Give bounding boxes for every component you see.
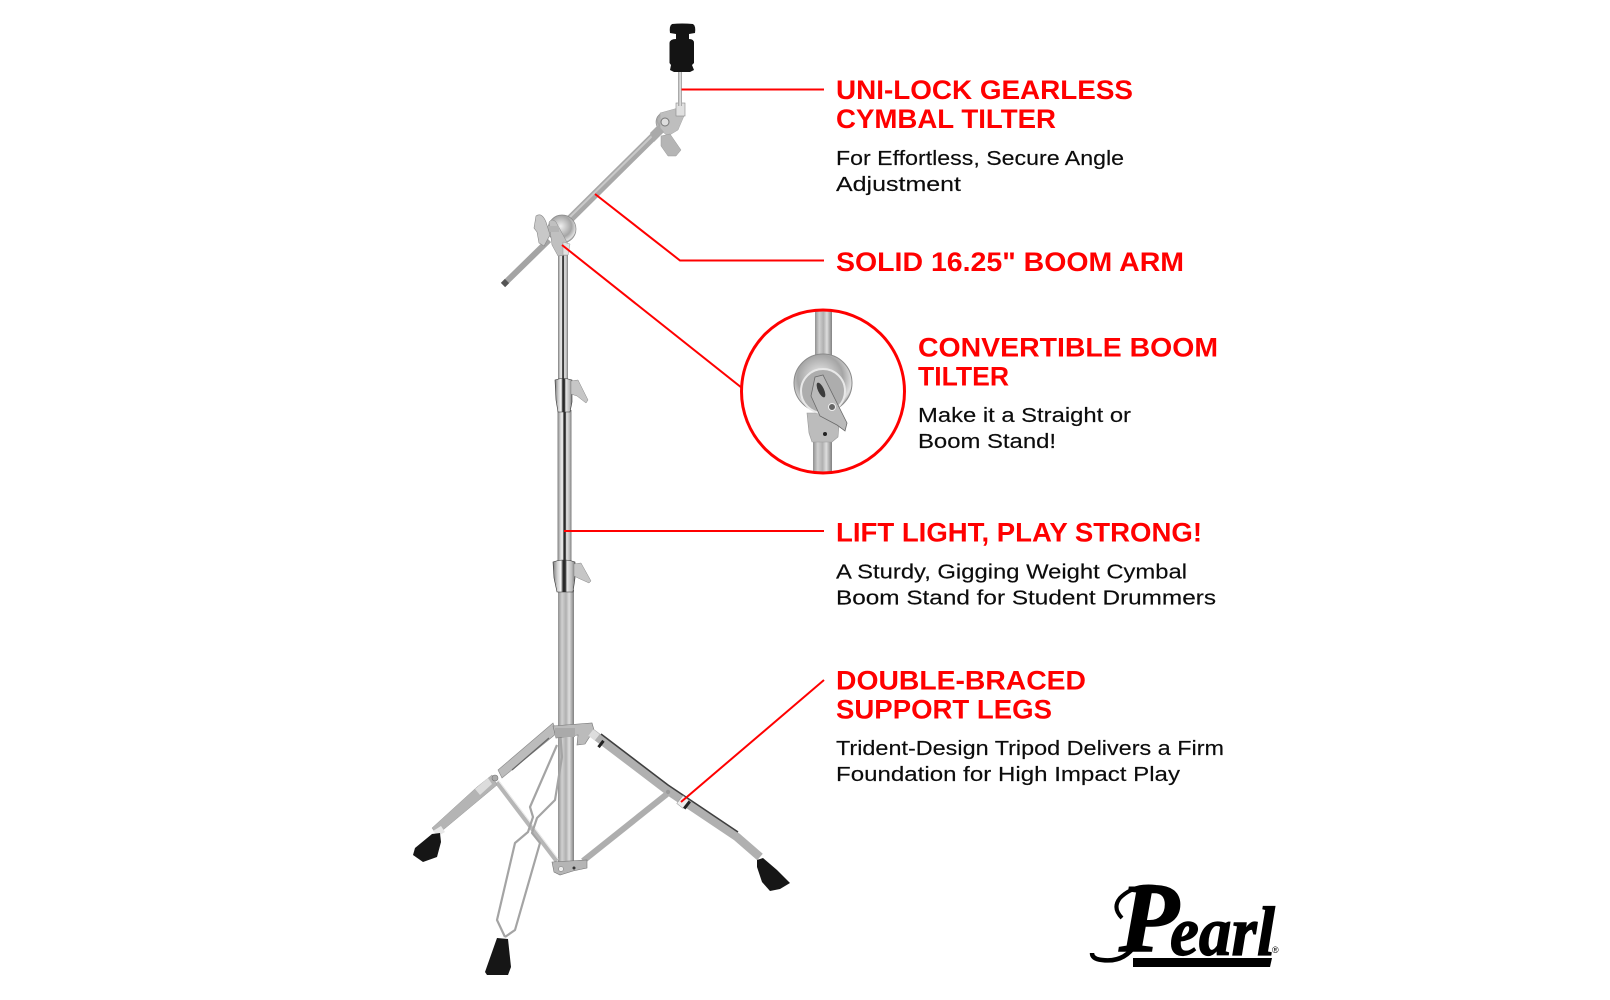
leader line: cymbal tilter: [682, 88, 824, 90]
lower tube: [558, 590, 574, 862]
heading: LIFT LIGHT, PLAY STRONG!: [836, 518, 1202, 548]
left leg: [432, 723, 557, 836]
Pearl logo: earl: [1170, 894, 1276, 971]
description: [836, 560, 1216, 610]
left brace: [497, 782, 557, 861]
boom arm: [503, 135, 655, 285]
heading: [836, 75, 1133, 134]
callout: lift light: [836, 518, 1216, 610]
description: Boom Stand!: [918, 430, 1056, 453]
heading: SUPPORT LEGS: [836, 694, 1052, 724]
front foot: [485, 938, 511, 975]
middle tube: [558, 410, 572, 562]
description: Boom Stand for Student Drummers: [836, 586, 1216, 610]
description: Make it a Straight or: [918, 404, 1131, 427]
leader line: boom tilter: [562, 245, 742, 388]
description: Foundation for High Impact Play: [836, 763, 1181, 786]
leader line: boom arm: [595, 194, 824, 260]
callout: uni-lock tilter: [836, 75, 1133, 196]
callout: boom arm heading: SOLID 16.25" BOOM ARM: [836, 247, 1184, 277]
inset circle detail: [742, 305, 904, 478]
heading: [918, 332, 1218, 392]
description: Trident-Design Tripod Delivers a Firm: [836, 737, 1224, 760]
left foot: [413, 833, 441, 862]
heading: TILTER: [918, 362, 1009, 392]
heading: CYMBAL TILTER: [836, 104, 1056, 134]
right foot: [757, 858, 790, 891]
leader line: stand weight: [564, 530, 824, 532]
callout: support legs: [836, 666, 1224, 786]
description: [918, 404, 1131, 453]
description: [836, 147, 1124, 196]
lower leg bracket: [552, 860, 587, 875]
description: [836, 737, 1224, 786]
upper leg bracket: [553, 723, 600, 745]
heading: [836, 666, 1086, 724]
heading: UNI-LOCK GEARLESS: [836, 75, 1133, 105]
description: Adjustment: [836, 173, 961, 196]
description: For Effortless, Secure Angle: [836, 147, 1124, 170]
lower height clamp: [553, 560, 591, 592]
description: A Sturdy, Gigging Weight Cymbal: [836, 560, 1187, 584]
black cymbal cap: [670, 24, 695, 72]
heading: CONVERTIBLE BOOM: [918, 332, 1218, 362]
heading: DOUBLE-BRACED: [836, 666, 1086, 696]
Pearl logo: P: [1118, 865, 1180, 973]
callout: convertible boom tilter: [742, 305, 1218, 478]
Pearl logo: [1092, 865, 1279, 973]
top tube: [558, 252, 568, 380]
cymbal boom stand: [413, 24, 790, 975]
right leg: [592, 733, 760, 857]
right brace: [583, 794, 667, 861]
boom clamp: [534, 215, 576, 256]
cymbal tilter: [650, 72, 685, 156]
front double-wire leg: [497, 730, 562, 937]
Pearl logo: ®: [1272, 945, 1279, 955]
upper height clamp: [555, 378, 588, 412]
leader line: support legs: [681, 680, 824, 802]
